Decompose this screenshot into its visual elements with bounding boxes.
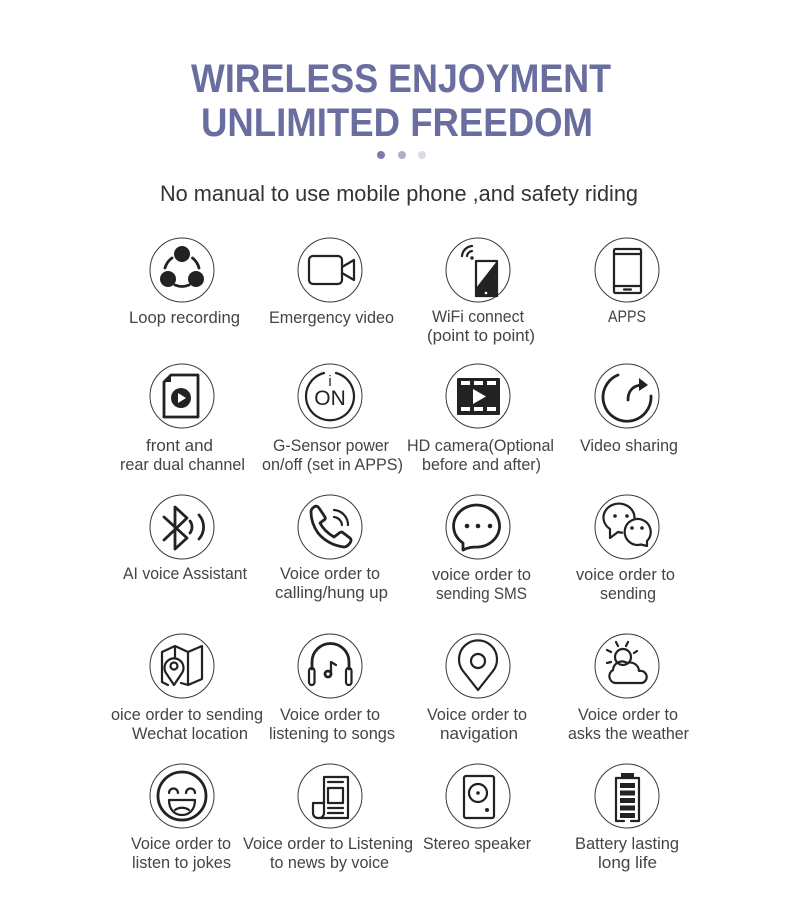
label: rear dual channel — [120, 456, 245, 474]
label — [427, 706, 527, 743]
label: front and — [146, 437, 213, 455]
label: oice order to sending — [111, 706, 263, 724]
feature: g-sensor power — [262, 364, 403, 474]
feature: voice order to sending — [576, 495, 675, 603]
pagination dots — [377, 151, 426, 159]
label — [111, 706, 263, 743]
label — [275, 565, 388, 602]
label: sending SMS — [436, 585, 527, 603]
feature: voice order to navigation — [427, 634, 527, 743]
label: voice order to — [576, 566, 675, 584]
label: on/off (set in APPS) — [262, 456, 403, 474]
icon: folded map with pin — [150, 634, 214, 698]
icon: bluetooth with sound waves — [150, 495, 214, 559]
label: Voice order to — [578, 706, 678, 724]
label — [120, 437, 245, 474]
title line 2: UNLIMITED FREEDOM — [201, 101, 593, 145]
feature: voice order to sending sms — [432, 495, 531, 603]
label: navigation — [440, 725, 518, 743]
label: (point to point) — [427, 327, 535, 345]
icon: speaker — [446, 764, 510, 828]
label: to news by voice — [270, 854, 389, 872]
label — [262, 437, 403, 474]
label: before and after) — [422, 456, 541, 474]
feature: voice order to sending wechat location — [111, 634, 263, 743]
label: Video sharing — [580, 437, 678, 455]
feature: video sharing — [580, 364, 678, 455]
title line 1: WIRELESS ENJOYMENT — [191, 57, 611, 101]
label: listening to songs — [269, 725, 395, 743]
icon: on switch: i — [328, 373, 332, 390]
icon: location pin — [446, 634, 510, 698]
label — [243, 835, 413, 872]
icon: film strip — [446, 364, 510, 428]
icon: speech bubble — [446, 495, 510, 559]
icon: on switch — [298, 364, 362, 428]
icon: wifi phone — [446, 238, 510, 302]
icon: video camera — [298, 238, 362, 302]
feature: voice order to listen to jokes — [131, 764, 231, 872]
label: sending — [600, 585, 656, 603]
label — [568, 706, 689, 743]
feature: voice order to calling — [275, 495, 388, 602]
icon: sun and cloud — [595, 634, 659, 698]
feature: ai voice assistant — [123, 495, 247, 583]
label: Voice order to — [427, 706, 527, 724]
label: Battery lasting — [575, 835, 679, 853]
icon: loop recording — [150, 238, 214, 302]
feature: hd camera — [407, 364, 554, 474]
label — [131, 835, 231, 872]
label: Emergency video — [269, 309, 394, 327]
label: Stereo speaker — [423, 835, 531, 853]
label: Wechat location — [132, 725, 248, 743]
icon: on switch: ON — [314, 387, 346, 410]
feature: voice order to asks the weather — [568, 634, 689, 743]
feature: wifi connect — [427, 238, 535, 345]
icon: headphones with note — [298, 634, 362, 698]
label: Voice order to — [280, 706, 380, 724]
feature: emergency video — [269, 238, 394, 327]
subtitle: No manual to use mobile phone ,and safety riding — [160, 181, 638, 206]
feature: front and rear dual channel — [120, 364, 245, 474]
feature: battery lasting long life — [575, 764, 679, 872]
label: calling/hung up — [275, 584, 388, 602]
feature: voice order to listening to news — [243, 764, 413, 872]
label — [432, 566, 531, 603]
label: WiFi connect — [432, 308, 524, 326]
label: AI voice Assistant — [123, 565, 247, 583]
icon: chat bubbles — [595, 495, 659, 559]
label: G-Sensor power — [273, 437, 389, 455]
label: Voice order to — [280, 565, 380, 583]
icon: battery — [595, 764, 659, 828]
label — [407, 437, 554, 474]
feature: voice order to listening to songs — [269, 634, 395, 743]
label — [269, 706, 395, 743]
icon: share arrow — [595, 364, 659, 428]
icon: video file — [150, 364, 214, 428]
feature: apps — [595, 238, 659, 326]
label — [576, 566, 675, 603]
label: asks the weather — [568, 725, 689, 743]
label: HD camera(Optional — [407, 437, 554, 455]
label: long life — [598, 854, 657, 872]
feature: stereo speaker — [423, 764, 531, 853]
label: Voice order to Listening — [243, 835, 413, 853]
feature: loop recording — [129, 238, 240, 327]
label: Voice order to — [131, 835, 231, 853]
label: voice order to — [432, 566, 531, 584]
header: title block — [191, 57, 611, 145]
label — [427, 308, 535, 345]
icon: phone handset — [298, 495, 362, 559]
icon: smartphone — [595, 238, 659, 302]
label: listen to jokes — [132, 854, 231, 872]
icon: smiley face — [150, 764, 214, 828]
label — [575, 835, 679, 872]
label: Loop recording — [129, 309, 240, 327]
label: APPS — [608, 308, 646, 326]
icon: newspaper — [298, 764, 362, 828]
